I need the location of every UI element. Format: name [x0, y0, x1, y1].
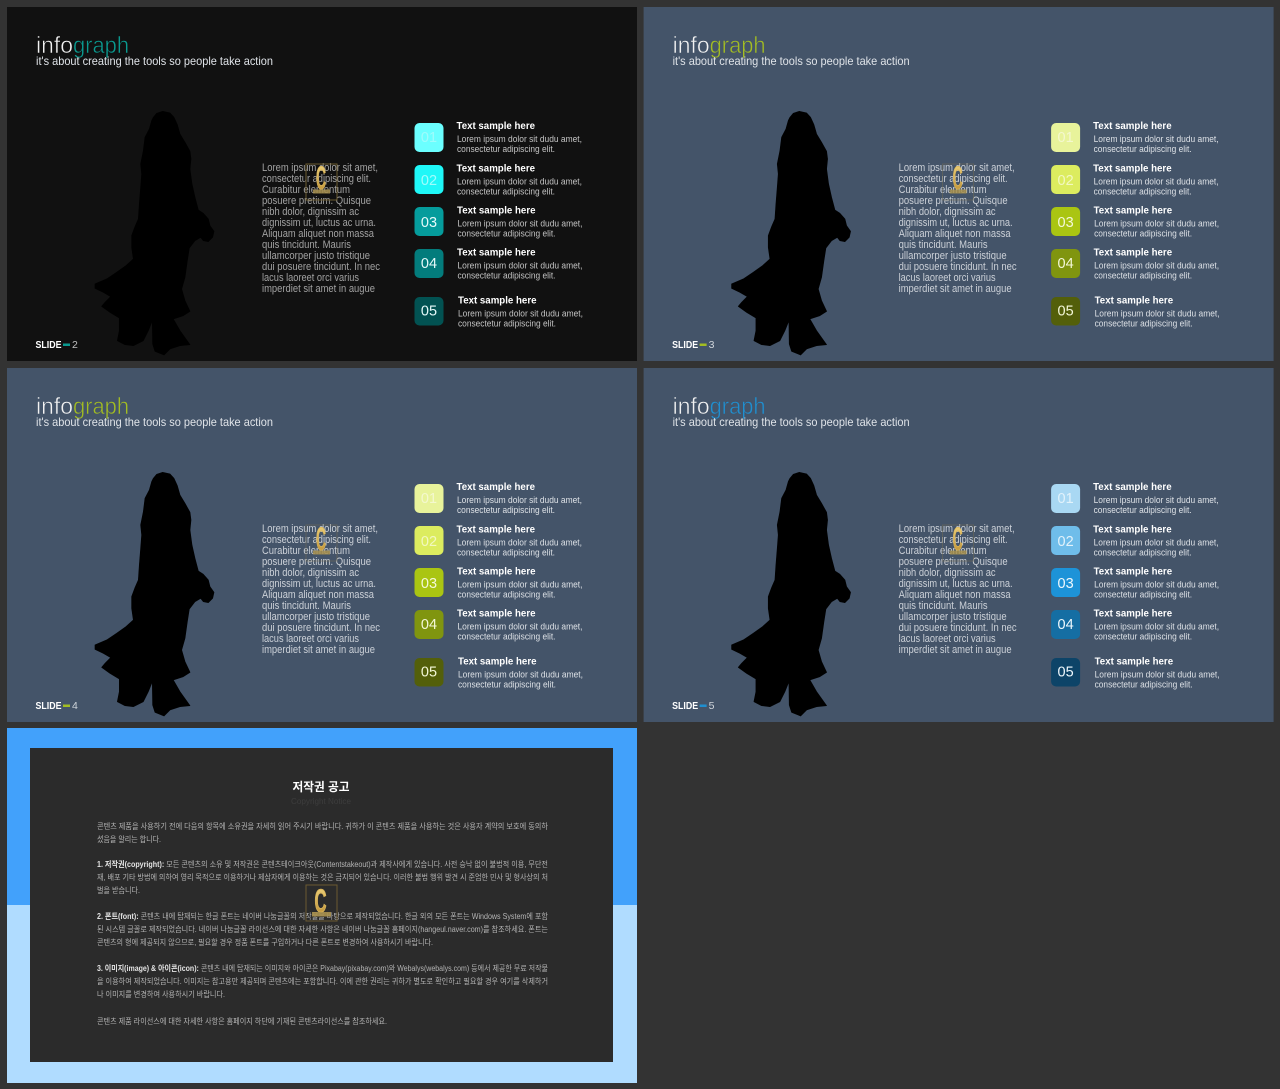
- body text: imperdiet sit amet in augue: [899, 644, 1012, 656]
- list item 03: Text sample here: [1094, 205, 1172, 216]
- icon: watermark: [306, 521, 337, 561]
- list item 02: Lorem ipsum dolor sit dudu amet,: [1094, 537, 1219, 547]
- list item 04: Lorem ipsum dolor sit dudu amet,: [1094, 261, 1219, 271]
- body text: ullamcorper justo tristique: [899, 611, 1007, 623]
- panel: copyright notice: [7, 728, 637, 1083]
- notice 3 image and icon: 3. 이미지(image) & 아이콘(icon): 콘텐츠 내에 탑재되는 이미지와 아이콘은 Pixabay(pixabay.com)와 Webalys(webalys.com) 등에서 제공한 무료 저작물: [97, 963, 548, 973]
- list item 05: [414, 656, 583, 689]
- list item 02: 02: [421, 173, 437, 189]
- title: [673, 393, 766, 419]
- notice 2 font: 콘텐츠의 형에 제공되지 않으므로, 필요할 경우 정품 폰트를 구입하거나 다른 폰트로 변경하여 사용하시기 바랍니다.: [97, 937, 433, 947]
- list item 01: Lorem ipsum dolor sit dudu amet,: [457, 134, 582, 144]
- panel: slide 2: [7, 7, 637, 361]
- notice 2 font: 2. 폰트(font): 콘텐츠 내에 탑재되는 한글 폰트는 네이버 나눔글꼴의 저작물을 바탕으로 제작되었습니다. 한글 외의 모든 폰트는 Windows System에 포함: [97, 911, 549, 921]
- list item 05: Lorem ipsum dolor sit dudu amet,: [1095, 669, 1220, 679]
- list item 02: Lorem ipsum dolor sit dudu amet,: [1094, 176, 1219, 186]
- list item 01: [414, 121, 582, 154]
- list item 04: [414, 609, 582, 642]
- list item 01: 01: [421, 491, 437, 507]
- body text: dui posuere tincidunt. In nec: [262, 261, 381, 273]
- list item 05: Text sample here: [1095, 295, 1173, 306]
- icon: watermark: C: [316, 160, 326, 196]
- body text: lacus laoreet orci varius: [899, 633, 996, 645]
- body text: posuere pretium. Quisque: [899, 556, 1008, 568]
- list item 01: Lorem ipsum dolor sit dudu amet,: [1094, 134, 1219, 144]
- icon: watermark: C: [953, 160, 963, 196]
- list item 02: Lorem ipsum dolor sit dudu amet,: [457, 176, 582, 186]
- list item 01: Lorem ipsum dolor sit dudu amet,: [457, 495, 582, 505]
- body text: Aliquam aliquet non massa: [262, 589, 374, 601]
- silhouette: [732, 472, 851, 716]
- panel: slide 3: [644, 7, 1274, 361]
- list item 01: consectetur adipiscing elit.: [1094, 505, 1192, 515]
- subheading: Copyright Notice: [291, 797, 352, 806]
- list item 05: consectetur adipiscing elit.: [458, 318, 556, 328]
- list item 03: [414, 205, 582, 238]
- list item 03: Lorem ipsum dolor sit dudu amet,: [1094, 579, 1219, 589]
- icon: watermark: C: [314, 883, 326, 919]
- notice 2 font: [97, 911, 549, 947]
- body text: imperdiet sit amet in augue: [262, 644, 375, 656]
- list item 02: [1051, 524, 1219, 557]
- body text: Curabitur elementum: [262, 545, 350, 557]
- body text: dignissim ut, luctus ac urna.: [262, 217, 376, 229]
- icon: watermark: [306, 883, 337, 921]
- list item 02: Text sample here: [456, 524, 535, 535]
- list item 04: 04: [421, 256, 437, 272]
- title: graph: [73, 32, 129, 58]
- body text: posuere pretium. Quisque: [899, 195, 1008, 207]
- body text: Lorem ipsum dolor sit amet,: [262, 162, 378, 174]
- notice intro: 콘텐츠 제품을 사용하기 전에 다음의 항목에 소유권을 자세히 읽어 주시기 바랍니다. 귀하가 이 콘텐츠 제품을 사용하는 것은 사용자 계약의 보호에 동의하: [97, 821, 549, 831]
- slide number: 5: [709, 700, 715, 712]
- list item 03: Text sample here: [1094, 566, 1172, 577]
- list item 02: Lorem ipsum dolor sit dudu amet,: [457, 537, 582, 547]
- body text: [899, 523, 1017, 656]
- slide number: SLIDE: [672, 700, 698, 712]
- body text: ullamcorper justo tristique: [262, 250, 370, 262]
- subtitle: it's about creating the tools so people take action: [673, 415, 910, 429]
- body text: dignissim ut, luctus ac urna.: [899, 578, 1013, 590]
- notice 3 image and icon: 을 이용하여 제작되었습니다. 이미지는 참고용만 제공되며 콘텐츠에는 포함합니다. 이에 관한 권리는 귀하가 별도로 확인하고 필요할 경우 여기를 삭제하거: [97, 976, 548, 986]
- list item 04: [1051, 248, 1219, 281]
- body text: imperdiet sit amet in augue: [899, 283, 1012, 295]
- list item 01: Lorem ipsum dolor sit dudu amet,: [1094, 495, 1219, 505]
- body text: consectetur adipiscing elit.: [262, 173, 371, 185]
- body text: [262, 523, 381, 656]
- list item 04: 04: [421, 617, 437, 633]
- icon: watermark: [306, 160, 337, 200]
- list item 03: [1051, 566, 1219, 599]
- list item 02: [414, 524, 582, 557]
- body text: [899, 162, 1017, 295]
- title: graph: [73, 393, 129, 419]
- list item 01: Text sample here: [1093, 121, 1172, 132]
- list item 04: Text sample here: [1094, 609, 1172, 620]
- list item 03: consectetur adipiscing elit.: [1094, 228, 1192, 238]
- body text: dignissim ut, luctus ac urna.: [262, 578, 376, 590]
- slide number: 4: [72, 700, 78, 712]
- list item 05: Lorem ipsum dolor sit dudu amet,: [458, 308, 583, 318]
- list item 05: 05: [421, 664, 437, 680]
- list item 02: 02: [421, 534, 437, 550]
- list item 01: Text sample here: [1093, 482, 1172, 493]
- body text: Curabitur elementum: [262, 184, 350, 196]
- silhouette: [95, 111, 214, 355]
- list item 01: consectetur adipiscing elit.: [457, 505, 555, 515]
- body text: quis tincidunt. Mauris: [899, 600, 988, 612]
- body text: dui posuere tincidunt. In nec: [899, 261, 1017, 273]
- list item 04: Text sample here: [457, 248, 536, 259]
- list item 04: [414, 248, 582, 281]
- icon: watermark: [943, 160, 974, 200]
- list item 04: Lorem ipsum dolor sit dudu amet,: [458, 622, 582, 632]
- list item 04: Text sample here: [1094, 248, 1172, 259]
- notice 3 image and icon: [97, 963, 548, 999]
- list item 01: Text sample here: [456, 482, 535, 493]
- list item 02: Text sample here: [456, 163, 535, 174]
- list item 03: [414, 566, 582, 599]
- notice closing line: 콘텐츠 제품 라이선스에 대한 자세한 사항은 홈페이지 하단에 기재된 콘텐츠라이선스를 참조하세요.: [97, 1016, 387, 1026]
- title: graph: [710, 32, 766, 58]
- list item 03: consectetur adipiscing elit.: [458, 228, 556, 238]
- list item 04: consectetur adipiscing elit.: [1094, 271, 1192, 281]
- list item 05: consectetur adipiscing elit.: [458, 679, 556, 689]
- body text: ullamcorper justo tristique: [899, 250, 1007, 262]
- list item 04: Lorem ipsum dolor sit dudu amet,: [1094, 622, 1219, 632]
- list item 04: consectetur adipiscing elit.: [458, 271, 556, 281]
- notice 2 font: 된 시스템 글꼴로 제작되었습니다. 네이버 나눔글꼴 라이선스에 대한 자세한 사항은 네이버 나눔글꼴 홈페이지(hangeul.naver.com)를 참조하세요. 폰트는: [97, 924, 548, 934]
- list item 04: Lorem ipsum dolor sit dudu amet,: [458, 261, 582, 271]
- title: info: [673, 393, 710, 419]
- notice 1 copyright: 벌을 받습니다.: [97, 885, 140, 895]
- list item 01: Text sample here: [456, 121, 535, 132]
- list item 01: consectetur adipiscing elit.: [457, 144, 555, 154]
- silhouette: [95, 472, 214, 716]
- body text: dui posuere tincidunt. In nec: [899, 622, 1017, 634]
- body text: lacus laoreet orci varius: [262, 272, 360, 284]
- title: info: [36, 32, 73, 58]
- body text: consectetur adipiscing elit.: [262, 534, 371, 546]
- body text: dignissim ut, luctus ac urna.: [899, 217, 1013, 229]
- list item 02: Text sample here: [1093, 524, 1172, 535]
- list item 03: 03: [1058, 215, 1074, 231]
- slide number: SLIDE: [672, 339, 698, 351]
- icon: watermark: C: [953, 521, 963, 557]
- notice intro: 셨음을 알리는 합니다.: [97, 834, 161, 844]
- list item 03: 03: [421, 215, 437, 231]
- list item 04: 04: [1058, 617, 1074, 633]
- title: info: [673, 32, 710, 58]
- list item 03: 03: [421, 576, 437, 592]
- heading: 저작권 공고: [292, 779, 350, 794]
- list item 02: [414, 163, 582, 196]
- list item 03: Text sample here: [457, 566, 536, 577]
- body text: nibh dolor, dignissim ac: [899, 206, 996, 218]
- body text: imperdiet sit amet in augue: [262, 283, 375, 295]
- body text: quis tincidunt. Mauris: [262, 600, 352, 612]
- list item 03: Lorem ipsum dolor sit dudu amet,: [458, 579, 582, 589]
- list item 04: consectetur adipiscing elit.: [1094, 632, 1192, 642]
- body text: nibh dolor, dignissim ac: [262, 567, 360, 579]
- title: [673, 32, 766, 58]
- notice 1 copyright: 재, 배포 기타 방법에 의하여 영리 목적으로 이용하거나 제삼자에게 이용하는 것은 금지되어 있습니다. 이러한 불법 행위 발견 시 준엄한 민사 및 형사상의 처: [97, 872, 548, 882]
- body text: ullamcorper justo tristique: [262, 611, 370, 623]
- slide number: SLIDE: [36, 700, 62, 712]
- list item 03: 03: [1058, 576, 1074, 592]
- list item 04: Text sample here: [457, 609, 536, 620]
- title: info: [36, 393, 73, 419]
- list item 03: Text sample here: [457, 205, 536, 216]
- notice intro: [97, 821, 549, 844]
- silhouette: [732, 111, 851, 355]
- list item 05: Lorem ipsum dolor sit dudu amet,: [458, 669, 583, 679]
- list item 05: Text sample here: [458, 656, 537, 667]
- list item 02: 02: [1058, 173, 1074, 189]
- list item 03: Lorem ipsum dolor sit dudu amet,: [458, 218, 582, 228]
- list item 01: 01: [1058, 491, 1074, 507]
- list item 03: consectetur adipiscing elit.: [1094, 589, 1192, 599]
- list item 01: [1051, 121, 1219, 154]
- list item 02: consectetur adipiscing elit.: [1094, 186, 1192, 196]
- list item 01: 01: [1058, 130, 1074, 146]
- notice 1 copyright: 1. 저작권(copyright): 모든 콘텐츠의 소유 및 저작권은 콘텐츠테이크아웃(Contentstakeout)과 제작사에게 있습니다. 사전 승낙 없이 불법적 이용, 무단전: [97, 859, 548, 869]
- body text: consectetur adipiscing elit.: [899, 534, 1008, 546]
- slide number: 2: [72, 339, 78, 351]
- body text: Curabitur elementum: [899, 545, 987, 557]
- list item 05: [414, 295, 583, 328]
- subtitle: it's about creating the tools so people take action: [36, 415, 273, 429]
- list item 05: Text sample here: [1095, 656, 1173, 667]
- subtitle: it's about creating the tools so people take action: [36, 54, 273, 68]
- body text: lacus laoreet orci varius: [899, 272, 996, 284]
- body text: [262, 162, 381, 295]
- slide number: 3: [709, 339, 715, 351]
- list item 04: 04: [1058, 256, 1074, 272]
- list item 05: consectetur adipiscing elit.: [1095, 318, 1193, 328]
- list item 01: [414, 482, 582, 515]
- body text: posuere pretium. Quisque: [262, 556, 371, 568]
- list item 05: 05: [1058, 304, 1074, 320]
- list item 05: consectetur adipiscing elit.: [1095, 679, 1193, 689]
- list item 05: [1051, 295, 1220, 328]
- list item 02: Text sample here: [1093, 163, 1172, 174]
- list item 02: consectetur adipiscing elit.: [457, 186, 555, 196]
- list item 04: consectetur adipiscing elit.: [458, 632, 556, 642]
- body text: Aliquam aliquet non massa: [262, 228, 374, 240]
- panel: slide 4: [7, 368, 637, 722]
- body text: consectetur adipiscing elit.: [899, 173, 1008, 185]
- body text: lacus laoreet orci varius: [262, 633, 360, 645]
- list item 04: [1051, 609, 1219, 642]
- list item 02: consectetur adipiscing elit.: [1094, 547, 1192, 557]
- title: [36, 32, 129, 58]
- body text: nibh dolor, dignissim ac: [262, 206, 360, 218]
- title: graph: [710, 393, 766, 419]
- body text: nibh dolor, dignissim ac: [899, 567, 996, 579]
- list item 05: 05: [421, 304, 437, 320]
- panel: slide 5: [644, 368, 1274, 722]
- body text: Lorem ipsum dolor sit amet,: [899, 523, 1015, 535]
- body text: Lorem ipsum dolor sit amet,: [262, 523, 378, 535]
- list item 02: [1051, 163, 1219, 196]
- list item 01: [1051, 482, 1219, 515]
- body text: Aliquam aliquet non massa: [899, 589, 1011, 601]
- notice 1 copyright: [97, 859, 548, 895]
- body text: dui posuere tincidunt. In nec: [262, 622, 381, 634]
- body text: quis tincidunt. Mauris: [899, 239, 988, 251]
- list item 05: Lorem ipsum dolor sit dudu amet,: [1095, 308, 1220, 318]
- body text: Lorem ipsum dolor sit amet,: [899, 162, 1015, 174]
- icon: watermark: C: [316, 521, 326, 557]
- list item 02: consectetur adipiscing elit.: [457, 547, 555, 557]
- list item 05: [1051, 656, 1220, 689]
- list item 03: Lorem ipsum dolor sit dudu amet,: [1094, 218, 1219, 228]
- body text: Aliquam aliquet non massa: [899, 228, 1011, 240]
- icon: watermark: [943, 521, 974, 561]
- list item 01: consectetur adipiscing elit.: [1094, 144, 1192, 154]
- body text: Curabitur elementum: [899, 184, 987, 196]
- subtitle: it's about creating the tools so people take action: [673, 54, 910, 68]
- slide number: SLIDE: [36, 339, 62, 351]
- list item 05: 05: [1058, 664, 1074, 680]
- body text: posuere pretium. Quisque: [262, 195, 371, 207]
- list item 03: [1051, 205, 1219, 238]
- list item 02: 02: [1058, 534, 1074, 550]
- notice 3 image and icon: 나 이미지를 변경하여 사용하시기 바랍니다.: [97, 989, 225, 999]
- list item 05: Text sample here: [458, 295, 537, 306]
- body text: quis tincidunt. Mauris: [262, 239, 352, 251]
- list item 01: 01: [421, 130, 437, 146]
- list item 03: consectetur adipiscing elit.: [458, 589, 556, 599]
- title: [36, 393, 129, 419]
